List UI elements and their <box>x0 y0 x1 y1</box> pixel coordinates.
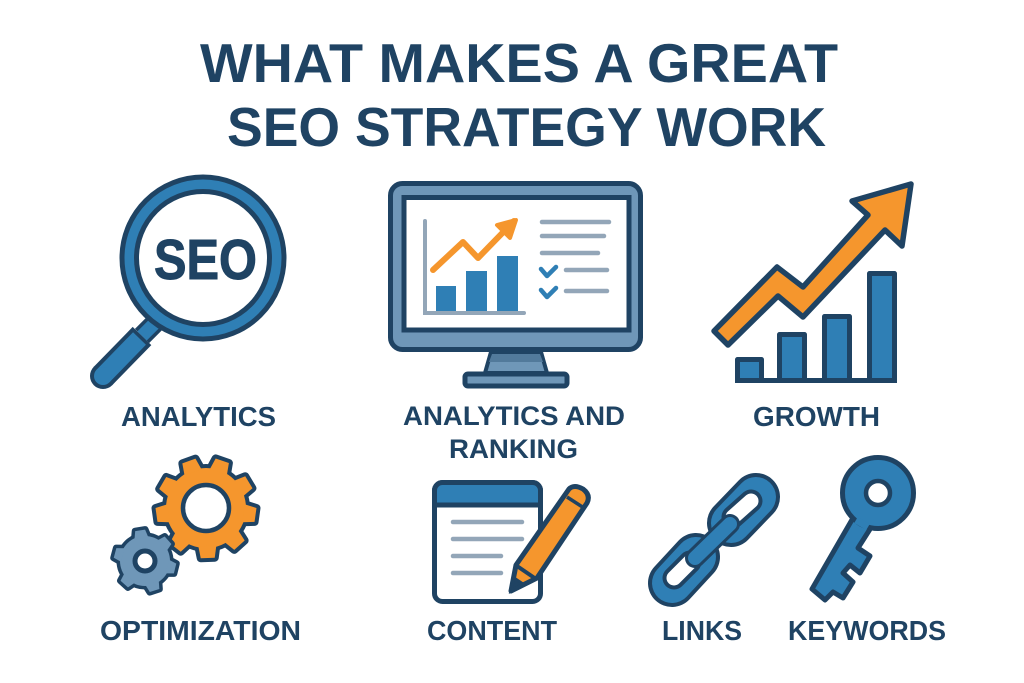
panel: content <box>427 482 588 646</box>
label: analytics and ranking: ANALYTICS AND <box>403 401 625 431</box>
icon: key <box>812 458 914 600</box>
label: optimization: OPTIMIZATION <box>100 615 301 646</box>
label: analytics and ranking: RANKING <box>449 434 578 464</box>
icon: notepad and pencil <box>434 482 588 602</box>
label: keywords: KEYWORDS <box>788 615 946 646</box>
label: growth: GROWTH <box>753 401 880 432</box>
title: SEO STRATEGY WORK <box>227 96 826 158</box>
label: analytics: ANALYTICS <box>121 401 276 432</box>
icon: small blue gear <box>113 529 177 593</box>
panel: optimization <box>100 458 301 646</box>
panel: growth <box>714 184 911 432</box>
title: WHAT MAKES A GREAT <box>200 32 838 94</box>
panel: analytics <box>90 177 284 432</box>
icon: growth arrow and bars <box>714 184 911 380</box>
icon: chain links <box>672 497 756 583</box>
icon: large orange gear <box>155 458 257 558</box>
icon: monitor <box>390 184 640 386</box>
icon: magnifying glass: SEO <box>154 228 257 292</box>
icon: gears <box>113 458 257 593</box>
panel: analytics and ranking <box>390 184 640 464</box>
label: links: LINKS <box>662 615 742 646</box>
icon: magnifying glass <box>90 177 284 389</box>
label: content: CONTENT <box>427 615 557 646</box>
panel: keywords <box>788 458 946 646</box>
title <box>200 32 838 158</box>
panel: links <box>662 497 756 646</box>
label: analytics and ranking <box>403 401 625 464</box>
